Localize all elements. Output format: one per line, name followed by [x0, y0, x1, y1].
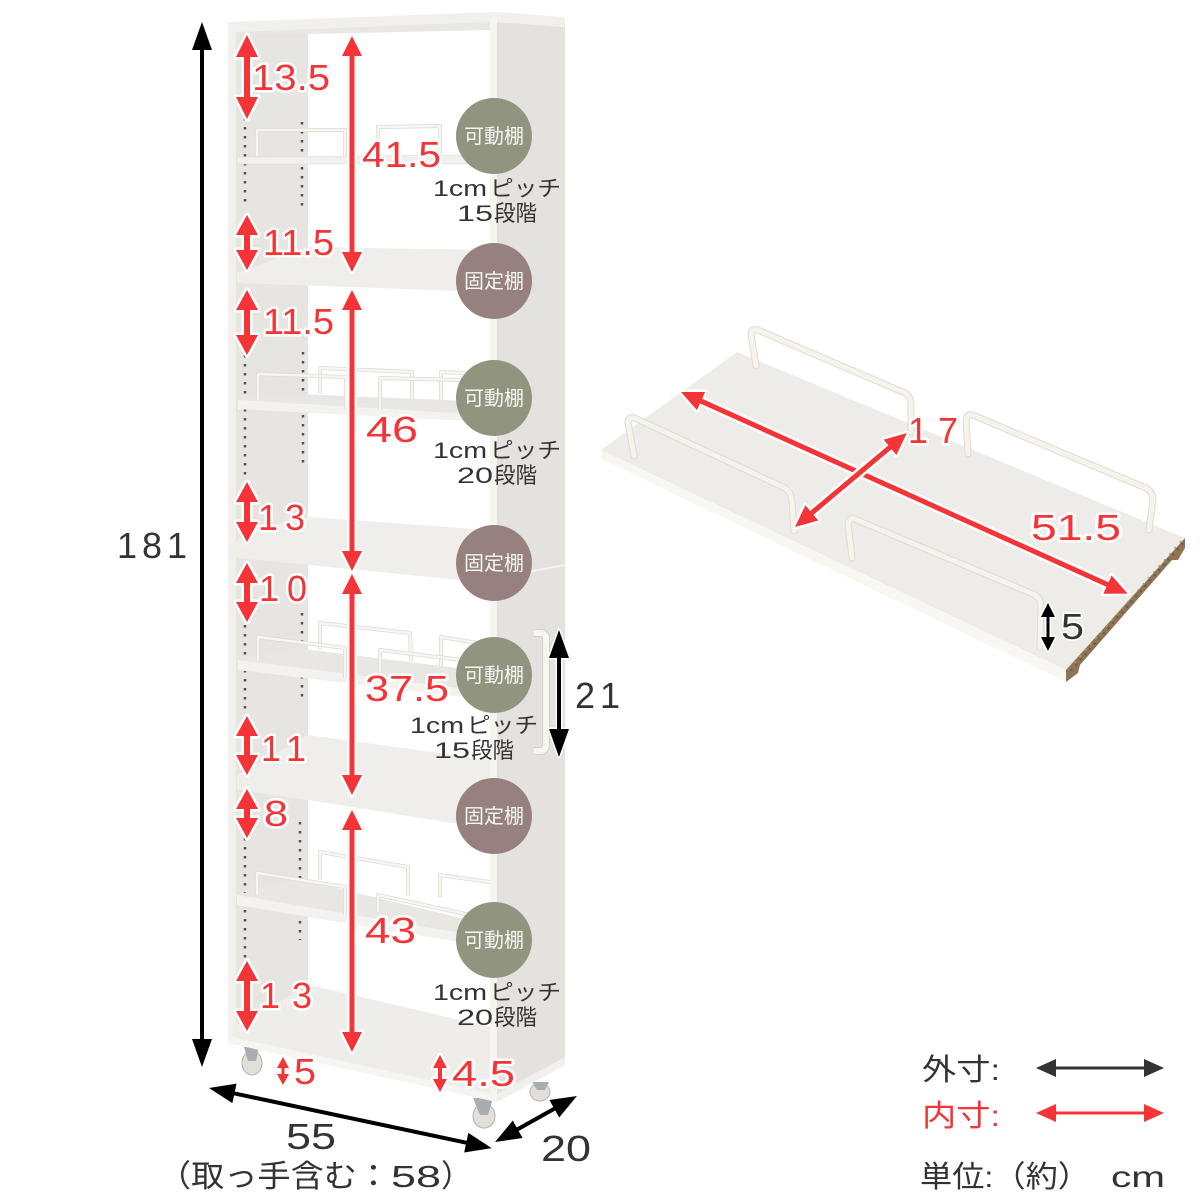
inner dimension labels: 11.5 [263, 301, 334, 342]
width label: 55 [286, 1116, 336, 1157]
fixed shelf 3 [237, 735, 490, 829]
inner dimension labels: 41.5 [362, 134, 441, 175]
adjustable shelf 2 [238, 368, 490, 422]
inner dimension arrows: bottom clearance [277, 1055, 447, 1092]
width with handle note: （取っ手含む： [158, 1159, 390, 1194]
legend: unit note: 単位:（約） [920, 1161, 1090, 1194]
badge: adjustable shelf 2 [456, 360, 532, 436]
adjustable shelf 3 [238, 623, 490, 700]
badge: fixed shelf 2 [456, 525, 532, 601]
note: 1cm pitch 15 steps lower: 段階 [471, 738, 514, 763]
note: 1cm pitch 15 steps lower: ピッチ [467, 713, 538, 738]
shelf length label: 51.5 [1031, 507, 1121, 548]
badge: adjustable shelf 2: 可動棚 [464, 387, 524, 410]
shelf depth label: 17 [908, 410, 958, 451]
shelf depth arrow [789, 425, 913, 535]
width arrow [207, 1078, 494, 1158]
shelf board illustration [601, 330, 1185, 682]
inner dimension labels: 10 [259, 568, 307, 609]
legend: inner dimensions [922, 1100, 1164, 1133]
adjustable shelf 1 [237, 126, 490, 164]
inner dimension labels: 5 [294, 1051, 316, 1092]
rails [628, 330, 1153, 647]
inner dimension labels: 8 [264, 793, 288, 834]
fixed shelf 2 [228, 517, 490, 583]
note: 1cm pitch 15 steps: ピッチ [490, 176, 561, 201]
note: 1cm pitch 20 steps lower: 段階 [494, 1005, 537, 1030]
note: 1cm pitch 20 steps: 1cm [433, 438, 487, 463]
note: 1cm pitch 20 steps: 20 [457, 463, 493, 488]
badge: adjustable shelf 4: 可動棚 [464, 929, 524, 952]
shelf length arrow [677, 383, 1132, 603]
note: 1cm pitch 20 steps lower: 20 [457, 1005, 493, 1030]
handle height label: 21 [575, 675, 620, 716]
inner dimension labels: 4.5 [452, 1053, 515, 1094]
legend: inner dimensions: 内寸: [922, 1100, 1000, 1133]
handle [534, 633, 546, 751]
cabinet side panel [497, 22, 565, 1102]
badge: adjustable shelf 4 [456, 902, 532, 978]
width with handle note: 58 [391, 1159, 441, 1194]
legend: outer dimensions: 外寸: [922, 1054, 1000, 1087]
inner dimension labels: 46 [366, 409, 418, 450]
depth arrow [490, 1087, 582, 1151]
inner dimension labels: 11 [261, 728, 306, 769]
rail height arrow [1041, 603, 1055, 651]
casters [242, 1047, 550, 1128]
right front upright [490, 12, 497, 1102]
inner dimension labels [252, 57, 515, 1094]
note: 1cm pitch 15 steps [433, 176, 561, 226]
legend: outer dimensions [922, 1054, 1164, 1087]
depth label: 20 [541, 1128, 591, 1169]
inner dimension labels: 11.5 [263, 222, 334, 263]
badge: adjustable shelf 1: 可動棚 [464, 125, 524, 148]
outer height arrow [192, 22, 212, 1067]
badge: fixed shelf 1: 固定棚 [464, 270, 524, 293]
adjustable shelf 4 [237, 852, 490, 947]
inner dimension labels: 43 [365, 910, 416, 951]
cabinet opening [236, 30, 490, 1040]
note: 1cm pitch 20 steps: ピッチ [490, 438, 561, 463]
rail height label: 5 [1061, 606, 1084, 647]
badge: fixed shelf 2: 固定棚 [464, 552, 524, 575]
note: 1cm pitch 20 steps lower: 1cm [433, 980, 487, 1005]
shelf top and front [601, 352, 1185, 670]
inner dimension labels: 37.5 [365, 668, 449, 709]
inner dimension labels: 13 [258, 497, 305, 538]
width with handle note: ） [441, 1159, 472, 1194]
note: 1cm pitch 15 steps: 段階 [494, 201, 537, 226]
note: 1cm pitch 15 steps lower: 15 [434, 738, 470, 763]
inner dimension arrows: centre column [342, 36, 362, 1052]
badge: fixed shelf 3 [456, 778, 532, 854]
peg holes [245, 118, 303, 960]
badge: adjustable shelf 3: 可動棚 [464, 664, 524, 687]
width with handle note [158, 1159, 472, 1194]
note: 1cm pitch 20 steps lower: ピッチ [490, 980, 561, 1005]
badge: fixed shelf 3: 固定棚 [464, 805, 524, 828]
badge: fixed shelf 1 [456, 243, 532, 319]
handle height arrow [549, 630, 569, 757]
cabinet front frame [228, 12, 497, 1102]
fixed shelf 1 [237, 247, 490, 292]
note: 1cm pitch 15 steps lower: 1cm [410, 713, 464, 738]
legend: unit note: cm [1111, 1161, 1165, 1194]
chipboard cut edge [1066, 538, 1185, 682]
note: 1cm pitch 20 steps: 段階 [494, 463, 537, 488]
note: 1cm pitch 20 steps [433, 438, 561, 488]
badge: adjustable shelf 1 [456, 98, 532, 174]
inner dimension arrows: left column [236, 35, 258, 1031]
inner dimension labels: 13.5 [252, 57, 330, 98]
legend: unit note [920, 1161, 1165, 1194]
bottom board [228, 985, 497, 1102]
note: 1cm pitch 15 steps: 15 [457, 201, 493, 226]
note: 1cm pitch 20 steps lower [433, 980, 561, 1030]
badge: adjustable shelf 3 [456, 637, 532, 713]
note: 1cm pitch 15 steps lower [410, 713, 538, 763]
note: 1cm pitch 15 steps: 1cm [433, 176, 487, 201]
height label: 181 [117, 525, 187, 566]
cabinet illustration [228, 12, 565, 1128]
inner dimension labels: 13 [260, 975, 312, 1016]
